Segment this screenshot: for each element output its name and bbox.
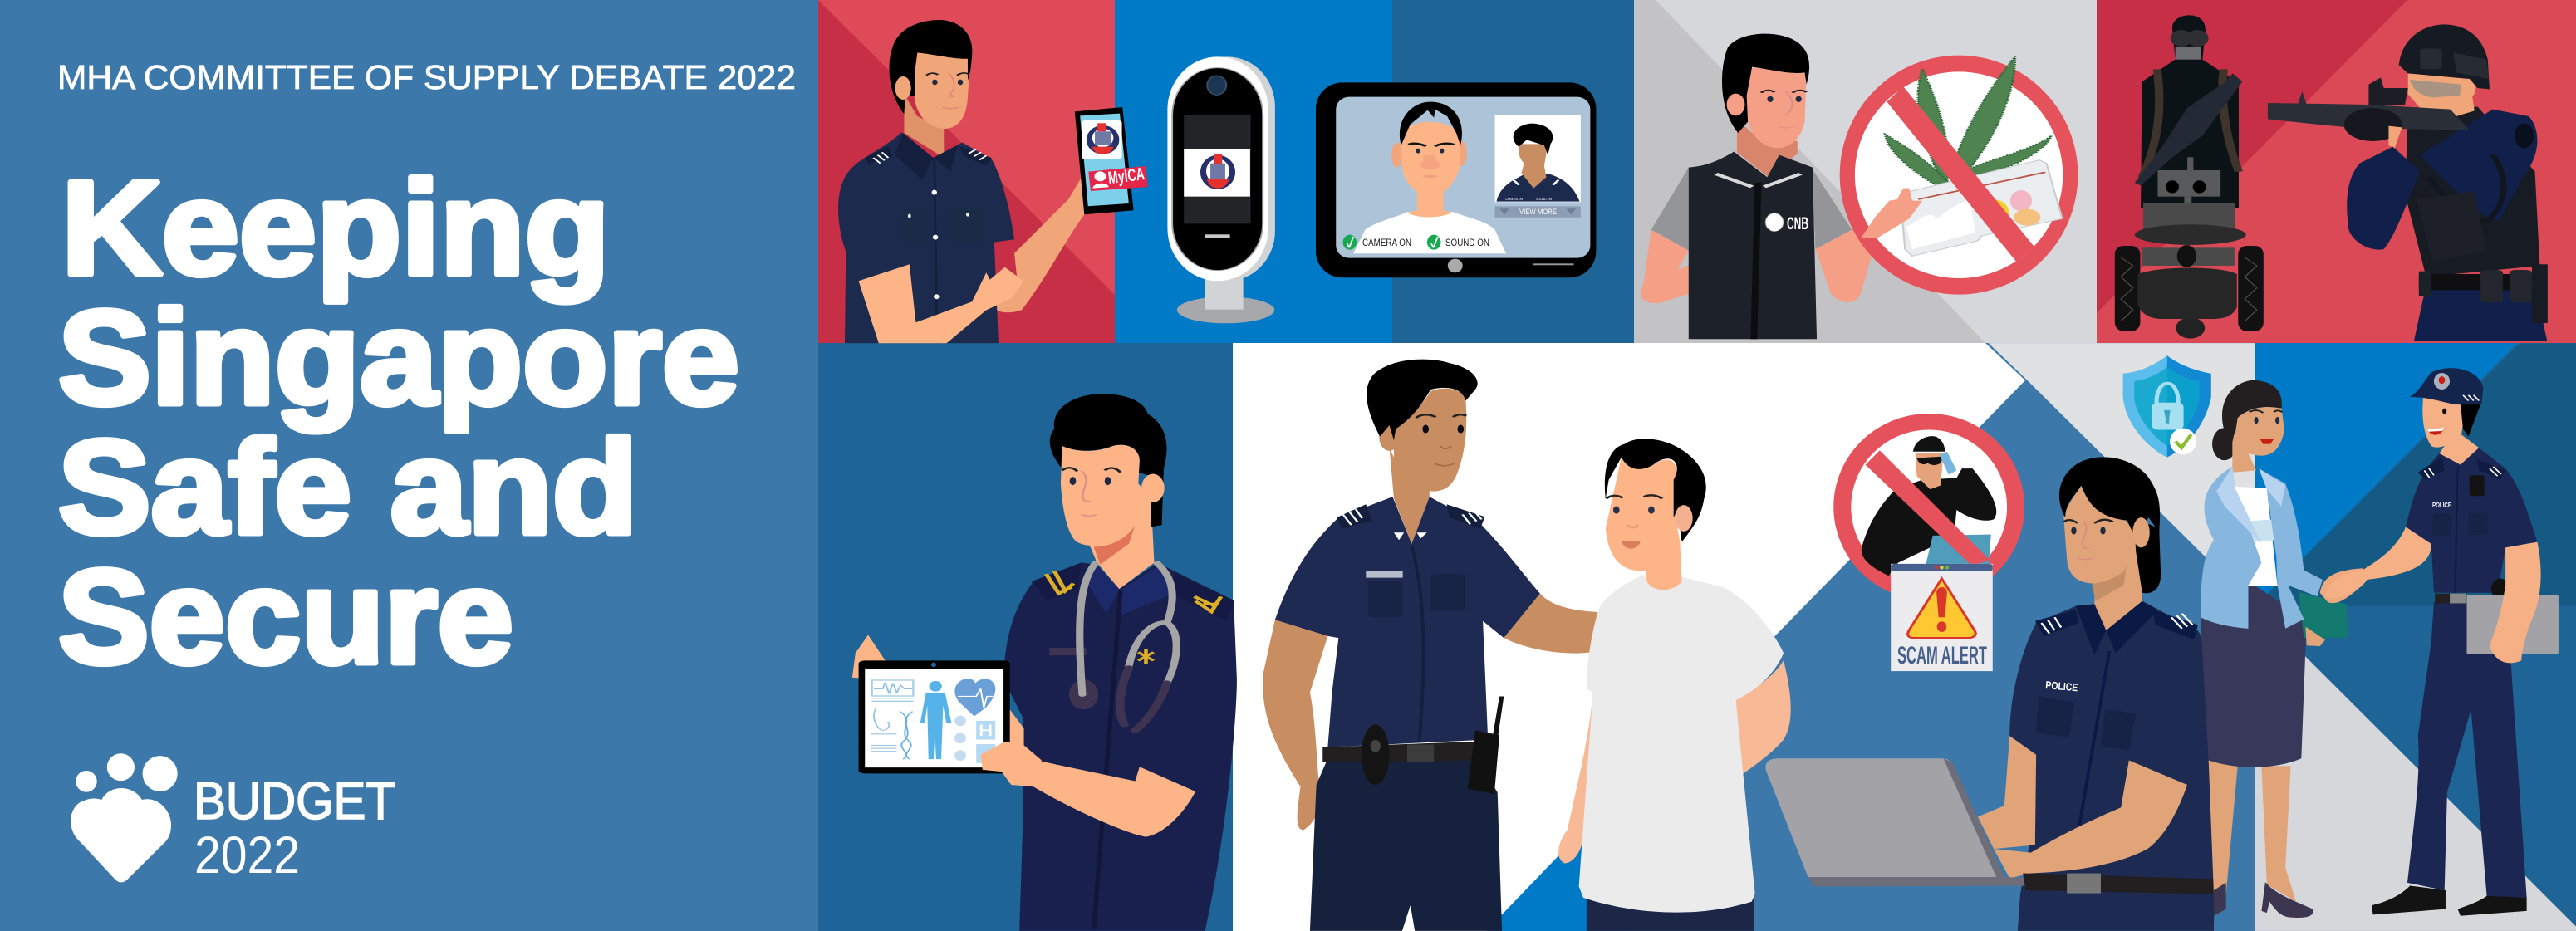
officer trousers <box>1310 757 1502 931</box>
paramedic neck <box>1087 480 1154 589</box>
man ear <box>1675 505 1693 532</box>
woman hair bun <box>2212 428 2236 460</box>
man trousers <box>1587 898 1754 931</box>
policeman epaulettes <box>2418 458 2505 480</box>
sign slash <box>1887 86 2034 262</box>
call person neck <box>1406 189 1453 217</box>
paramedic collar <box>1087 565 1175 615</box>
myica badge <box>1088 166 1148 191</box>
woman features <box>2250 410 2282 444</box>
officer collar <box>895 133 963 180</box>
paramedic neck shadow <box>1094 525 1135 565</box>
policeman handshake arm <box>2325 527 2431 598</box>
paramedic hand <box>981 742 1042 786</box>
officer body camera holster <box>1362 724 1390 785</box>
myica user icon <box>1092 171 1109 189</box>
budget 2022 logo: 2022 <box>194 826 300 884</box>
tablet screen <box>1336 97 1590 258</box>
laptop lid <box>1765 758 2004 877</box>
woman blouse <box>2235 487 2278 586</box>
paramedic fingers <box>852 635 886 679</box>
paramedic arm <box>1005 709 1195 837</box>
policeman clipboard <box>2467 595 2559 654</box>
policeman placket <box>2455 467 2458 593</box>
green folder <box>2299 592 2348 638</box>
officer shirt placket <box>1411 546 1424 742</box>
paramedic placket <box>1094 591 1121 928</box>
tablet home button <box>1448 259 1463 272</box>
officer neck <box>1390 448 1430 544</box>
camera on label: CAMERA ON <box>1362 237 1411 248</box>
call person head <box>1391 102 1467 197</box>
paramedic uniform <box>1003 563 1237 931</box>
officer shirt <box>838 132 1014 343</box>
officer pockets <box>1368 574 1465 617</box>
woman skirt <box>2201 581 2307 767</box>
officer name bar <box>1366 571 1403 578</box>
woman belt <box>2023 874 2214 894</box>
kiosk stem <box>1205 277 1244 310</box>
officer ear <box>1379 424 1400 451</box>
swat forearm <box>2388 126 2402 148</box>
kiosk slit <box>1205 234 1230 238</box>
prohibition ring <box>1833 414 2024 600</box>
cnb label: CNB <box>1787 214 1808 233</box>
officer features <box>1416 414 1466 466</box>
prohibition slash <box>1866 450 1990 566</box>
hacker mask <box>1916 457 1943 465</box>
officer epaulettes <box>865 147 992 166</box>
panel: top grey CNB background <box>1634 0 2097 343</box>
sound on label: SOUND ON <box>1445 237 1489 248</box>
woman hair <box>2059 457 2160 537</box>
title: Secure <box>58 542 513 692</box>
woman face <box>2063 486 2129 583</box>
officer radio <box>1468 696 1504 794</box>
man arm left <box>1558 693 1606 863</box>
officer shirt <box>1275 497 1540 747</box>
vest stripes <box>1716 174 1800 187</box>
title: Keeping <box>61 154 610 303</box>
facial features <box>1761 91 1807 128</box>
swat face <box>2408 73 2475 116</box>
officer buckle <box>1407 744 1434 762</box>
officer hair <box>1367 360 1478 440</box>
woman ear <box>2132 517 2150 547</box>
panel: top dark blue background <box>1392 0 1634 343</box>
swat left arm <box>2347 147 2420 250</box>
robot wheels <box>2115 246 2264 339</box>
officer ear <box>895 76 911 100</box>
officer face <box>912 52 970 129</box>
icon: CNB emblem <box>1765 213 1784 232</box>
swat shoulder patch <box>2515 123 2534 148</box>
figure: robot with silhouette officer <box>2115 15 2264 339</box>
ear <box>1727 94 1744 115</box>
officer placket and buttons <box>932 158 940 343</box>
kiosk base <box>1177 296 1274 323</box>
silhouette straps <box>2142 69 2239 177</box>
silhouette body <box>2141 60 2239 208</box>
officer pockets <box>903 208 983 243</box>
woman features <box>2063 520 2113 560</box>
woman lapels <box>2216 467 2285 544</box>
woman jacket <box>2201 467 2323 629</box>
prohibition inner <box>1851 429 2007 584</box>
neck <box>1737 119 1798 177</box>
right hand <box>1861 189 1922 238</box>
paramedic name bar <box>1049 648 1087 655</box>
officer hair <box>889 20 972 114</box>
woman shoes <box>2214 882 2313 918</box>
panel: bright blue wedge <box>1486 822 1628 931</box>
paramedic tablet <box>859 660 1010 773</box>
swat lower body <box>2414 285 2547 341</box>
man face and neck <box>1606 458 1682 590</box>
officer near arm <box>859 264 984 343</box>
woman pockets <box>2036 696 2136 750</box>
policeman holster <box>2491 579 2510 600</box>
title: Singapore <box>58 283 739 433</box>
silhouette rifle <box>2135 73 2242 185</box>
kiosk camera <box>1207 76 1226 95</box>
panel: bottom dark blue paramedic background <box>818 343 1233 931</box>
grey sleeves <box>1651 168 1852 251</box>
paramedic face <box>1061 445 1140 546</box>
woman shirt <box>2009 601 2216 931</box>
mini sound label: SOUND ON <box>1536 197 1552 201</box>
phone <box>1075 107 1134 214</box>
officer neck <box>904 94 944 158</box>
paramedic facial features <box>1062 468 1121 516</box>
laptop base <box>1808 877 2068 886</box>
paramedic epaulettes <box>1032 563 1234 621</box>
title <box>58 154 739 692</box>
man arm right <box>1666 660 1791 833</box>
woman neck and face <box>2232 407 2284 473</box>
figure: woman in blue blazer <box>2201 380 2367 918</box>
icon: star of life <box>1138 649 1154 664</box>
woman neck <box>2094 517 2142 632</box>
face <box>1743 68 1807 148</box>
robot plate <box>2135 224 2246 245</box>
left arm <box>1641 230 1742 303</box>
policeman pockets <box>2433 513 2487 536</box>
figure: ICA kiosk <box>1167 56 1275 323</box>
woman buckle <box>2067 874 2101 894</box>
check icons <box>1343 235 1441 250</box>
robot chassis <box>2137 245 2237 319</box>
silhouette head <box>2172 15 2206 60</box>
officer face <box>1394 389 1466 492</box>
woman neck shadow <box>2092 566 2127 601</box>
no drugs sign ring <box>1840 56 2078 295</box>
man hair <box>1605 439 1706 542</box>
figure: video call tablet <box>1316 82 1596 277</box>
officer far arm <box>994 177 1086 312</box>
silhouette goggles <box>2171 30 2209 60</box>
swat helmet <box>2399 24 2490 89</box>
hacker body <box>1862 468 1996 576</box>
swat upper arm <box>2420 110 2537 222</box>
swat goggles <box>2410 80 2461 97</box>
hacker phone <box>1940 452 1956 474</box>
budget 2022 logo <box>71 753 395 884</box>
policeman neck and face <box>2422 397 2479 465</box>
drug bags <box>1900 160 2062 256</box>
figure: paramedic <box>852 394 1237 931</box>
woman far arm <box>1978 736 2036 849</box>
tablet slider <box>1533 263 1574 265</box>
panel: bottom white background <box>1233 343 2025 931</box>
panel: bottom right geometric background <box>1989 343 2576 931</box>
woman epaulette chevrons <box>2042 614 2192 634</box>
officer epaulettes <box>1337 504 1484 540</box>
no drugs sign inner <box>1855 71 2063 278</box>
subtitle: MHA COMMITTEE OF SUPPLY DEBATE 2022 <box>57 58 796 96</box>
icon: ICA emblem <box>1200 154 1235 189</box>
panel: top blue background <box>1115 0 1392 343</box>
hacker face <box>1916 453 1943 489</box>
robot torso <box>2143 203 2235 234</box>
title: Safe and <box>58 413 637 562</box>
woman folder fingers <box>2305 627 2325 646</box>
panel: top red SWAT background <box>2097 0 2576 343</box>
policeman trousers <box>2407 602 2527 898</box>
myica label: MyICA <box>1107 164 1146 188</box>
swat pouch <box>2417 191 2486 262</box>
stethoscope <box>1069 563 1176 730</box>
swat rifle <box>2268 77 2470 130</box>
officer near hand <box>972 267 1023 311</box>
officer right arm <box>1504 594 1602 654</box>
man features <box>1607 495 1662 549</box>
paramedic ear <box>1141 474 1165 502</box>
police label on policewoman: POLICE <box>2045 679 2078 693</box>
icon: warning triangle <box>1908 579 1975 638</box>
pills <box>1982 190 2040 227</box>
hair <box>1722 34 1809 133</box>
laptop edge <box>1943 758 2004 877</box>
right arm <box>1816 230 1877 302</box>
mini camera label: CAMERA ON <box>1505 197 1523 201</box>
woman blouse band <box>2245 519 2276 542</box>
tablet body <box>1316 82 1596 277</box>
figure: scam warning sign <box>1833 414 2024 671</box>
woman hair <box>2222 380 2282 434</box>
icon: paw heart <box>71 753 178 882</box>
woman hair back <box>2134 517 2161 593</box>
cannabis leaves <box>1885 56 2051 193</box>
kiosk white screen <box>1184 149 1250 197</box>
alert card bar <box>1891 564 1993 571</box>
figure: police officer with hand on shoulder <box>1263 360 1602 931</box>
woman collar <box>2035 601 2198 655</box>
swat vest <box>2405 106 2539 277</box>
vest <box>1689 152 1817 339</box>
policeman features <box>2427 403 2480 437</box>
figure: policewoman with laptop <box>1765 457 2216 931</box>
swat ear <box>2461 78 2475 98</box>
figure: policeman shaking hands <box>2325 368 2559 916</box>
vest zip <box>1754 183 1758 339</box>
alert card <box>1891 564 1993 671</box>
policeman shoes <box>2372 886 2527 916</box>
woman near arm <box>1994 761 2187 878</box>
kiosk shell <box>1180 56 1275 281</box>
view more arrows <box>1499 208 1576 214</box>
figure: man in white shirt <box>1558 439 1791 931</box>
figure: SWAT officer <box>2268 24 2548 341</box>
swat gloves <box>2344 108 2402 141</box>
policeman belt <box>2435 594 2466 603</box>
kiosk screen <box>1184 115 1251 223</box>
swat shoulder strap <box>2429 155 2504 222</box>
policeman body camera <box>2470 475 2485 496</box>
panel: top red ICA background <box>818 0 1115 343</box>
photo card <box>1495 115 1581 202</box>
paramedic hair <box>1050 394 1166 527</box>
woman placket <box>2078 651 2109 830</box>
woman legs <box>2209 758 2296 902</box>
call person shirt <box>1353 212 1506 253</box>
logo wordmark: BUDGET <box>194 772 395 831</box>
icon: security shield <box>2123 355 2211 458</box>
police label on policeman: POLICE <box>2432 502 2452 509</box>
kiosk face <box>1172 68 1263 271</box>
view more label: VIEW MORE <box>1519 208 1557 216</box>
scam alert label: SCAM ALERT <box>1897 642 1987 669</box>
policeman shirt <box>2406 448 2537 593</box>
figure: CNB officer <box>1641 34 2078 339</box>
view more bar <box>1495 206 1581 218</box>
man shirt <box>1579 575 1784 913</box>
officer facial features <box>926 73 969 109</box>
hacker hat <box>1913 436 1945 452</box>
officer belt <box>1322 742 1475 762</box>
figure: ICA officer with phone <box>838 20 1148 343</box>
policeman right arm <box>2490 542 2541 663</box>
policeman cap <box>2410 368 2483 404</box>
robot head <box>2157 157 2220 209</box>
policeman cap badge <box>2434 373 2479 401</box>
mini officer <box>1496 124 1580 202</box>
clasped hands <box>2320 568 2367 603</box>
swat belt <box>2419 264 2548 323</box>
kiosk bezel <box>1167 56 1268 281</box>
officer left arm <box>1263 620 1327 830</box>
hacker laptop <box>1926 535 1991 566</box>
